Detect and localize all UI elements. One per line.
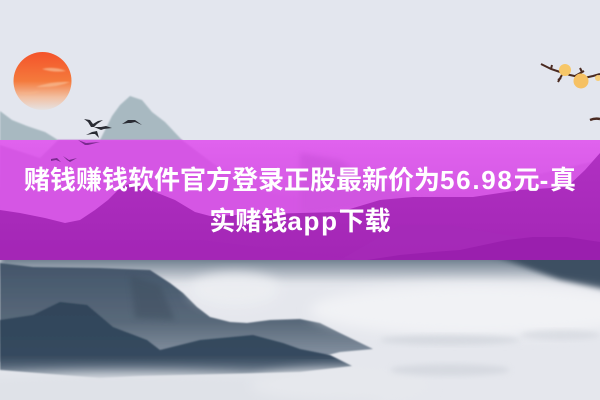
band: central mountain xyxy=(0,153,600,260)
rear cliff xyxy=(0,263,373,362)
band: far ridges xyxy=(0,140,600,260)
distant mountains xyxy=(0,96,182,150)
band: left shade xyxy=(0,240,360,260)
fog background xyxy=(0,260,507,261)
lower misty mountains xyxy=(0,260,600,378)
title xyxy=(24,165,576,236)
dark horizon strip xyxy=(0,260,562,283)
band: front ridge xyxy=(367,237,600,260)
title: 实赌钱app下载 xyxy=(209,206,391,236)
flock of birds xyxy=(84,119,142,138)
front dark hills xyxy=(0,302,352,378)
band: birds xyxy=(51,140,100,162)
fog banks xyxy=(0,363,297,379)
band: mid haze xyxy=(340,225,600,260)
cliff shadow streaks xyxy=(134,282,172,319)
branch with plum blossoms xyxy=(541,64,600,120)
sun xyxy=(14,52,72,110)
right shade xyxy=(498,260,600,293)
title: 赌钱赚钱软件官方登录正股最新价为56.98元-真 xyxy=(24,165,576,195)
magenta title band xyxy=(0,140,600,260)
